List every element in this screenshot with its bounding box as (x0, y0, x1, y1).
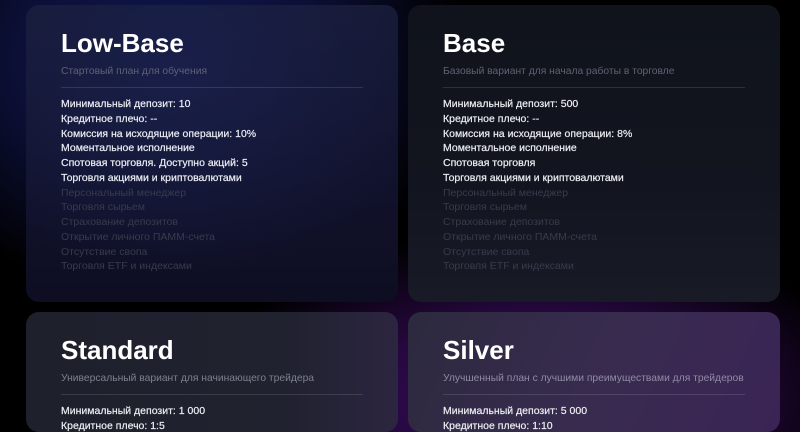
feature list: Base: Отсутствие свопа (443, 246, 529, 258)
feature list: Low-Base: Торговля ETF и индексами (61, 260, 192, 272)
feature list: Silver (443, 405, 587, 432)
feature list: Low-Base: Комиссия на исходящие операции: 10% (61, 128, 256, 140)
feature list: Base: Спотовая торговля (443, 157, 535, 169)
feature list: Low-Base: Страхование депозитов (61, 216, 178, 228)
heading: Silver: Silver (443, 335, 514, 365)
panel: Low-Base plan (26, 5, 398, 302)
feature list: Standard: Кредитное плечо: 1:5 (61, 420, 165, 432)
feature list: Low-Base: Торговля акциями и криптовалютами (61, 172, 242, 184)
feature list: Low-Base: Спотовая торговля. Доступно акций: 5 (61, 157, 248, 169)
subtitle: Standard: Универсальный вариант для начинающего трейдера (61, 373, 314, 384)
feature list: Low-Base: Моментальное исполнение (61, 142, 195, 154)
feature list: Low-Base: Открытие личного ПАММ-счета (61, 231, 215, 243)
feature list: Silver: Кредитное плечо: 1:10 (443, 420, 553, 432)
feature list: Base: Комиссия на исходящие операции: 8% (443, 128, 632, 140)
feature list: Base (443, 98, 632, 272)
panel: Silver plan (408, 312, 780, 432)
feature list: Base: Торговля сырьем (443, 201, 527, 213)
feature list: Base: Торговля ETF и индексами (443, 260, 574, 272)
subtitle: Silver: Улучшенный план с лучшими преимуществами для трейдеров (443, 373, 744, 384)
subtitle: Low-Base: Стартовый план для обучения (61, 66, 207, 77)
feature list: Standard: Минимальный депозит: 1 000 (61, 405, 205, 417)
heading: Low-Base: Low-Base (61, 28, 184, 58)
feature list: Low-Base: Минимальный депозит: 10 (61, 98, 190, 110)
panel: Base plan (408, 5, 780, 302)
feature list: Silver: Минимальный депозит: 5 000 (443, 405, 587, 417)
feature list: Base: Кредитное плечо: -- (443, 113, 539, 125)
feature list: Base: Минимальный депозит: 500 (443, 98, 578, 110)
feature list: Base: Персональный менеджер (443, 186, 568, 198)
feature list: Base: Страхование депозитов (443, 216, 560, 228)
feature list: Base: Торговля акциями и криптовалютами (443, 172, 624, 184)
feature list: Low-Base: Персональный менеджер (61, 186, 186, 198)
subtitle: Base: Базовый вариант для начала работы в торговле (443, 66, 674, 77)
feature list: Base: Моментальное исполнение (443, 142, 577, 154)
feature list: Base: Открытие личного ПАММ-счета (443, 231, 597, 243)
heading: Standard: Standard (61, 335, 174, 365)
feature list: Standard (61, 405, 205, 432)
feature list: Low-Base: Кредитное плечо: -- (61, 113, 157, 125)
feature list: Low-Base (61, 98, 256, 272)
heading: Base: Base (443, 28, 505, 58)
feature list: Low-Base: Торговля сырьем (61, 201, 145, 213)
panel: Standard plan (26, 312, 398, 432)
feature list: Low-Base: Отсутствие свопа (61, 246, 147, 258)
